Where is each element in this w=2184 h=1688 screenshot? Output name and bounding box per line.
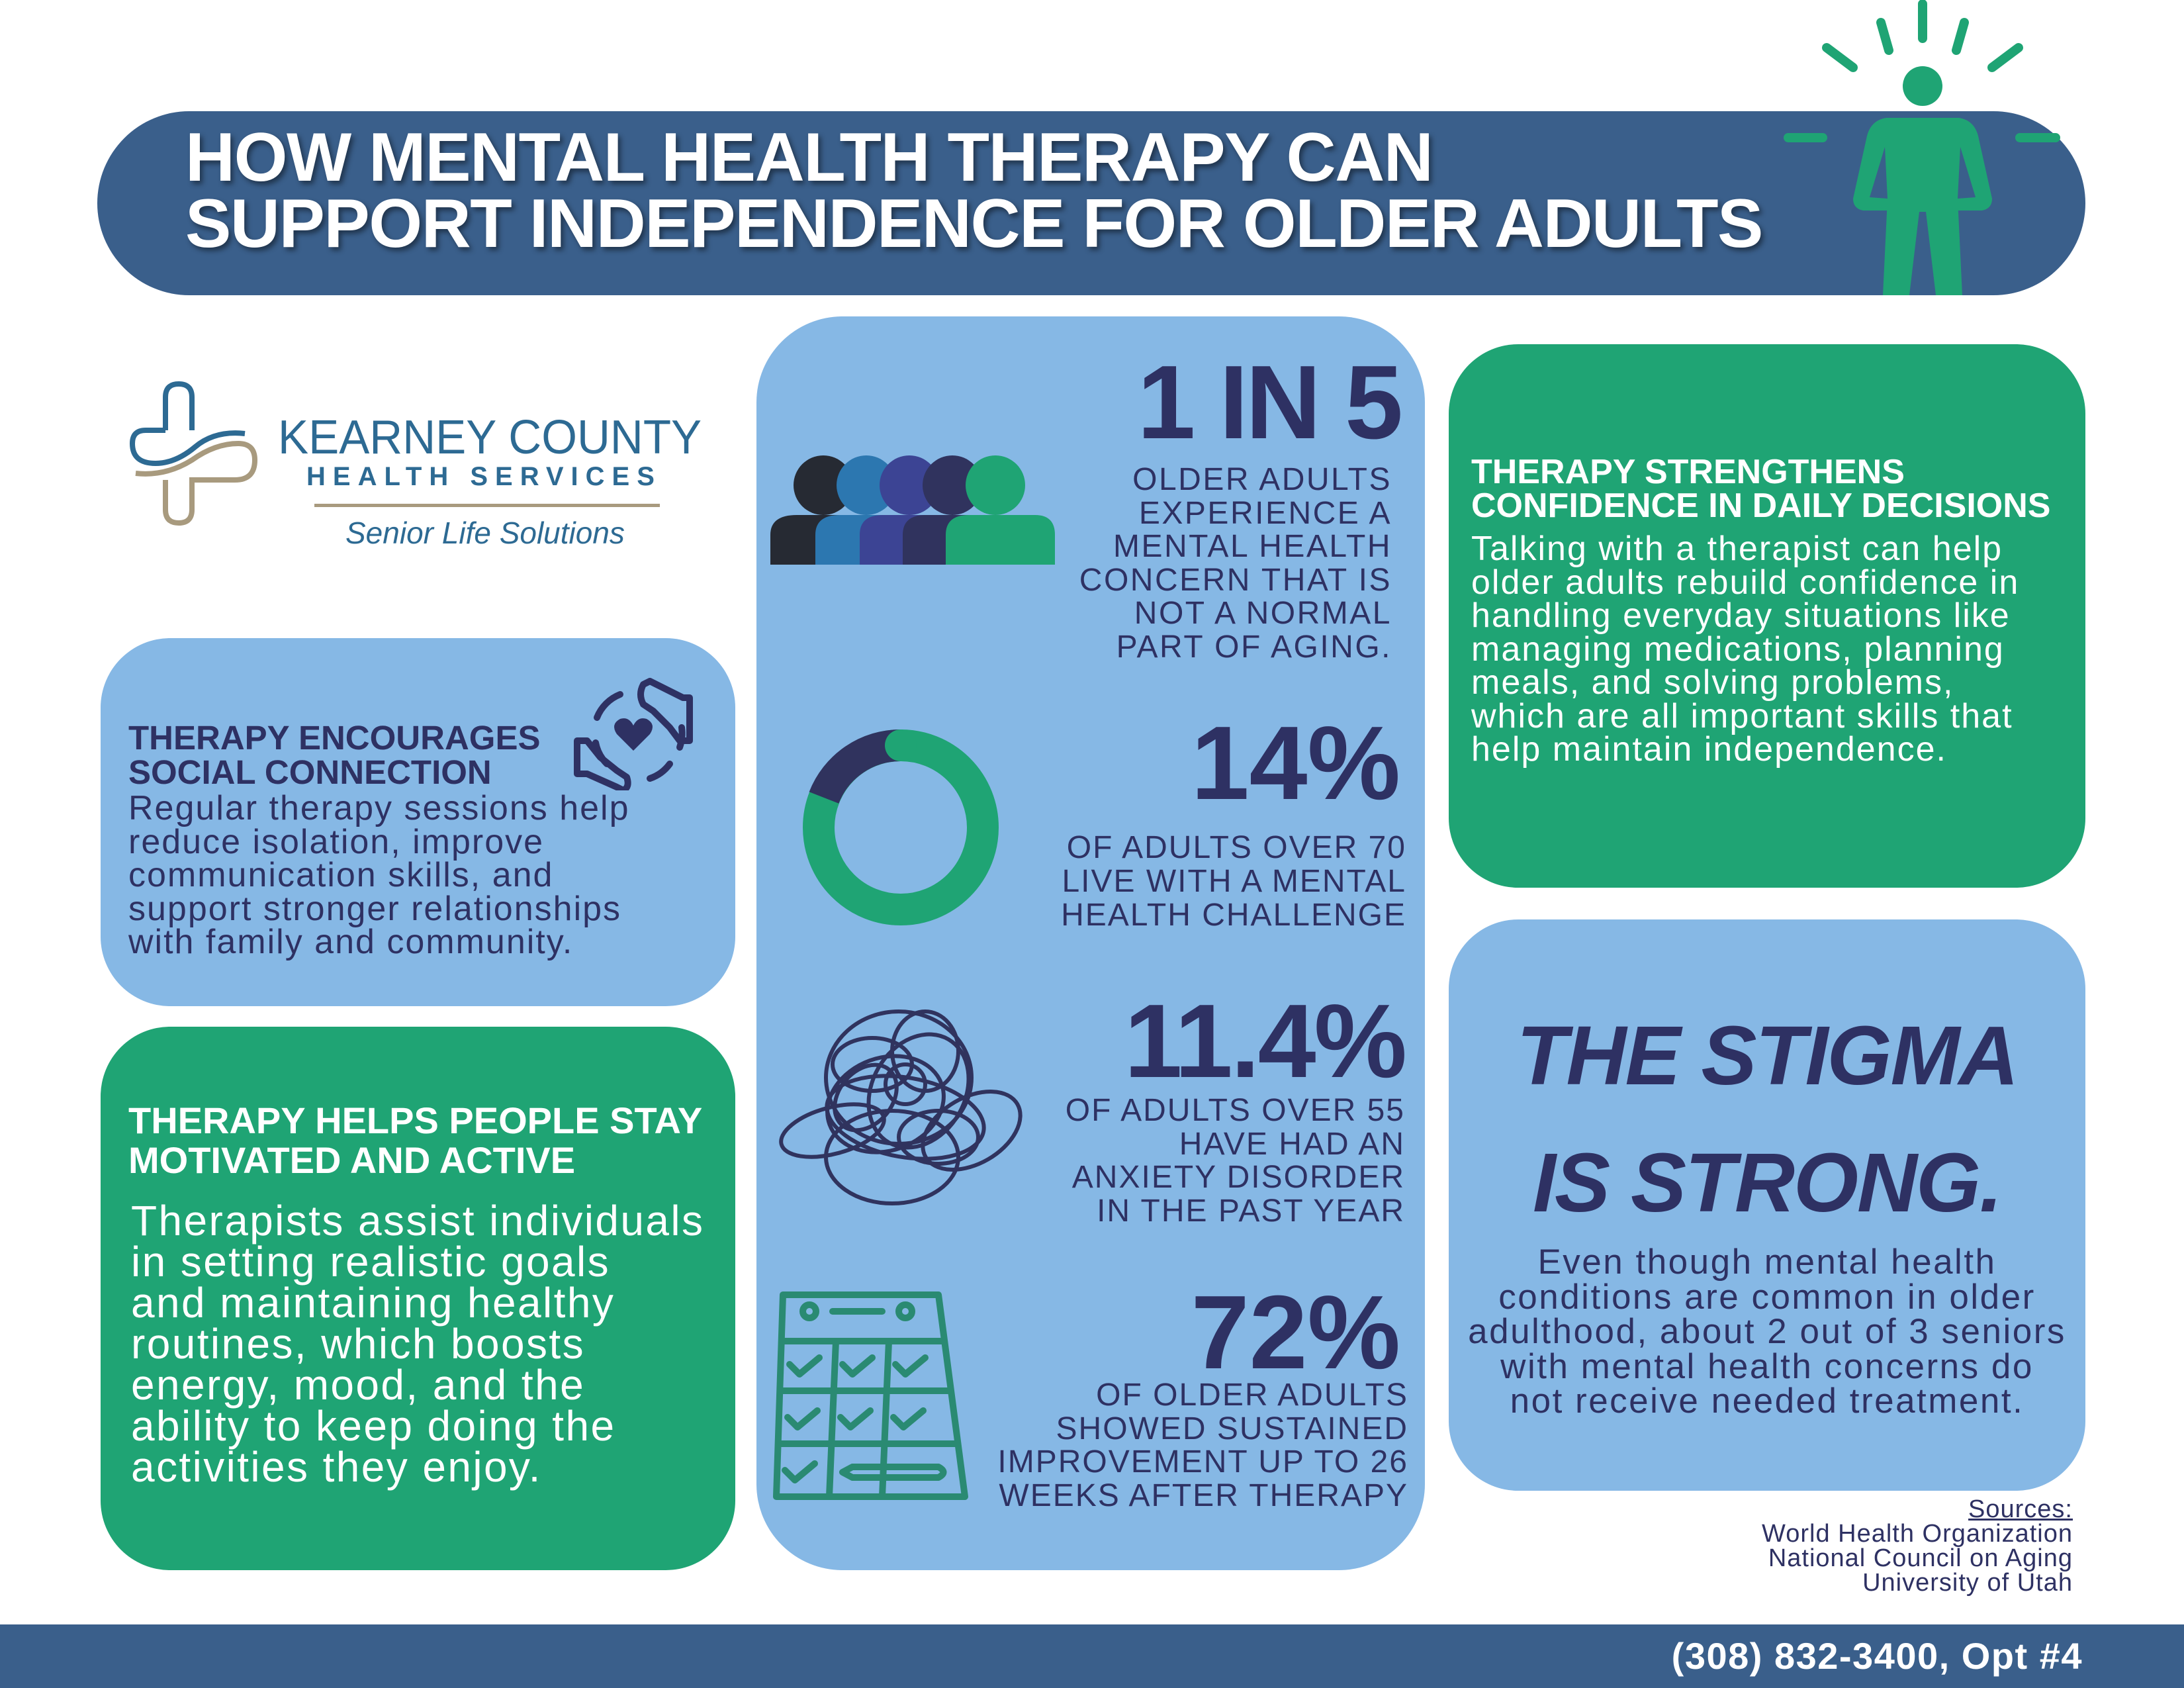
heading: THERAPY STRENGTHENS [1471,453,1905,491]
body text: support stronger relationships [128,890,621,928]
caption: OLDER ADULTS [1132,462,1392,497]
body text [128,789,630,961]
caption: OF ADULTS OVER 55 [1066,1093,1405,1128]
body text: Therapists assist individuals [131,1197,704,1244]
body text [131,1197,704,1491]
heading: CONFIDENCE IN DAILY DECISIONS [1471,487,2050,525]
heading: THERAPY HELPS PEOPLE STAY [128,1100,702,1141]
body text: help maintain independence. [1471,730,1947,769]
header bar [97,111,2085,295]
icon: people group [770,455,1055,565]
icon: calendar checklist [773,1291,968,1500]
body text: reduce isolation, improve [128,822,544,861]
icon: confident figure [1784,0,2060,295]
stat: 11.4% [779,983,1405,1229]
body text: Regular therapy sessions help [128,789,630,827]
caption: ANXIETY DISORDER [1072,1160,1405,1195]
title: SUPPORT INDEPENDENCE FOR OLDER ADULTS [185,185,1762,262]
body text [1468,1243,2066,1421]
heading [128,1100,702,1181]
number: 72% [1191,1274,1400,1391]
icon: scribble [779,1009,1023,1205]
number: 11.4% [1124,983,1405,1100]
caption [997,1378,1408,1513]
heading [1517,1009,2017,1229]
caption: SHOWED SUSTAINED [1056,1411,1408,1446]
body text: conditions are common in older [1498,1278,2036,1317]
caption: LIVE WITH A MENTAL [1062,864,1406,899]
body text: not receive needed treatment. [1510,1382,2024,1421]
stat: 72% [773,1274,1408,1513]
heading: MOTIVATED AND ACTIVE [128,1139,575,1181]
heading: THERAPY ENCOURAGES [128,719,540,757]
body text: adulthood, about 2 out of 3 seniors [1468,1312,2066,1351]
caption: EXPERIENCE A [1139,495,1392,531]
heading: IS STRONG. [1533,1136,2001,1229]
logo: Kearney County Health Services: Senior Life Solutions [345,516,625,550]
icon: hands with heart [574,678,693,790]
body text: meals, and solving problems, [1471,663,1954,702]
heading: SOCIAL CONNECTION [128,753,492,791]
caption: MENTAL HEALTH [1113,529,1392,564]
caption [1061,830,1406,933]
title: HOW MENTAL HEALTH THERAPY CAN [185,119,1432,196]
body text: handling everyday situations like [1471,596,2011,635]
caption: OF OLDER ADULTS [1096,1378,1408,1413]
logo: Kearney County Health Services [130,381,702,550]
sources: University of Utah [1862,1569,2073,1597]
icon: cross logo [130,381,257,526]
caption: HAVE HAD AN [1179,1127,1405,1161]
logo text: KEARNEY COUNTY [278,411,702,464]
panel: motivated and active [101,1027,735,1570]
caption: IN THE PAST YEAR [1097,1193,1405,1229]
caption: NOT A NORMAL [1134,596,1392,631]
caption: PART OF AGING. [1116,629,1392,665]
body text: and maintaining healthy [131,1279,615,1327]
body text: older adults rebuild confidence in [1471,563,2019,601]
phone number: (308) 832-3400, Opt #4 [1672,1635,2083,1677]
sources: Sources: [1968,1495,2073,1523]
sources: National Council on Aging [1768,1544,2073,1572]
heading [1471,453,2050,525]
body text: ability to keep doing the [131,1402,615,1450]
title [185,119,1766,262]
donut chart [803,729,999,925]
body text: energy, mood, and the [131,1361,585,1409]
heading: THE STIGMA [1517,1009,2017,1102]
body text [1471,530,2019,769]
stat: 1 in 5 [770,344,1400,665]
number: 14% [1191,705,1400,821]
caption: IMPROVEMENT UP TO 26 [997,1444,1408,1479]
caption [1079,462,1392,665]
body text: activities they enjoy. [131,1443,542,1491]
panel: social connection [101,638,735,1006]
body text: with family and community. [128,923,573,961]
sources [1762,1495,2073,1597]
caption [1066,1093,1405,1229]
body text: routines, which boosts [131,1320,585,1368]
body text: with mental health concerns do [1500,1347,2034,1386]
body text: which are all important skills that [1471,696,2013,735]
logo: Kearney County Health Services: HEALTH SERVICES [306,462,662,491]
number: 1 IN 5 [1137,344,1400,461]
panel: confidence in daily decisions [1449,344,2085,888]
panel: statistics [756,316,1425,1570]
caption: HEALTH CHALLENGE [1061,898,1406,933]
caption: WEEKS AFTER THERAPY [999,1477,1408,1513]
caption: OF ADULTS OVER 70 [1067,830,1406,865]
sources: World Health Organization [1762,1520,2073,1548]
stat: 14% [803,705,1406,933]
body text: Talking with a therapist can help [1471,530,2003,568]
body text: managing medications, planning [1471,630,2005,669]
body text: Even though mental health [1537,1243,1997,1282]
heading [128,719,540,791]
panel: stigma [1449,919,2085,1491]
body text: in setting realistic goals [131,1238,610,1286]
body text: communication skills, and [128,856,553,894]
caption: CONCERN THAT IS [1079,563,1392,597]
footer bar [0,1624,2184,1688]
